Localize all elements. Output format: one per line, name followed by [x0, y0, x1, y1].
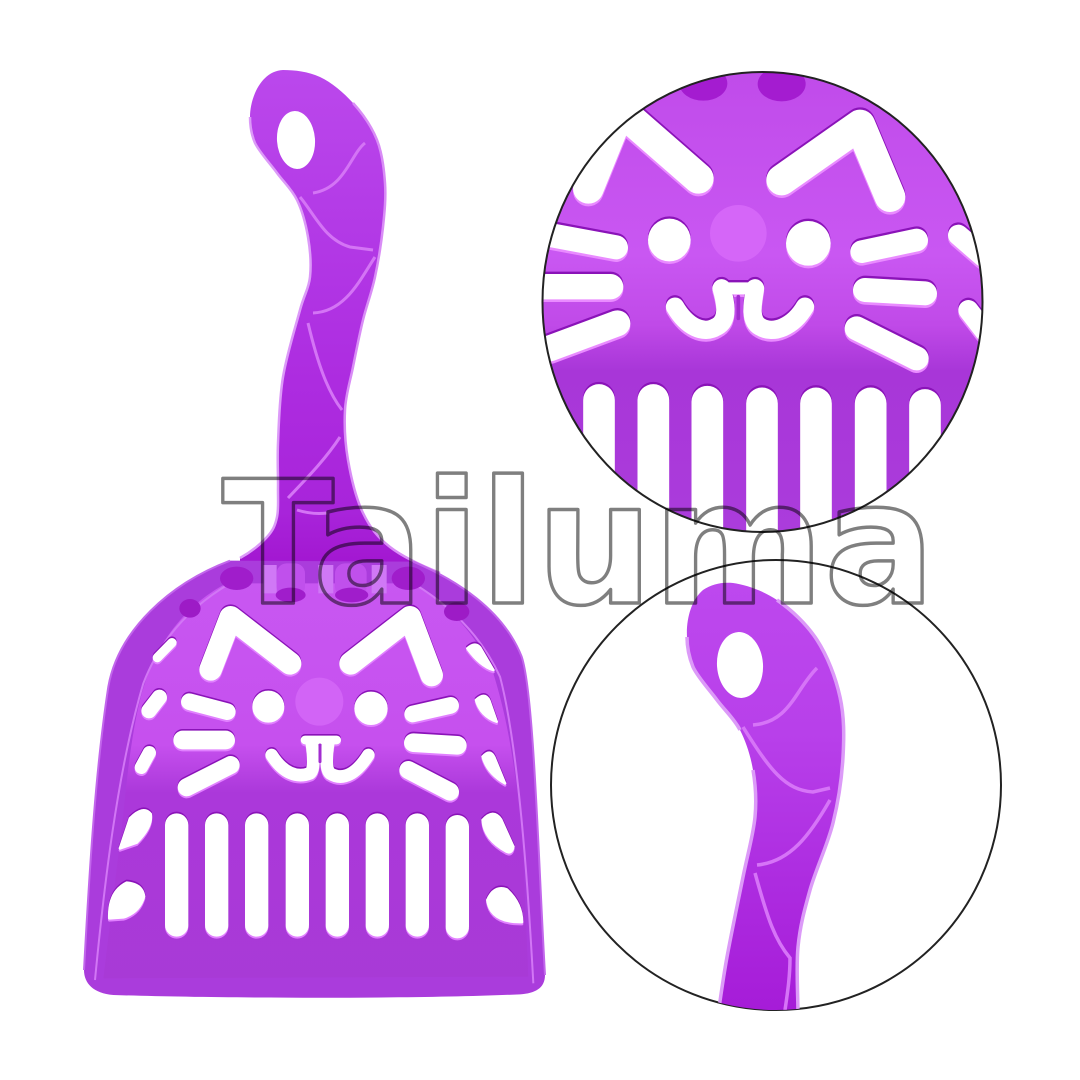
inner face panel [103, 583, 528, 978]
panel: full scoop product view [84, 70, 545, 998]
cat face and slot openings [109, 617, 522, 927]
circle outline [542, 72, 982, 532]
handle hanging hole [275, 110, 317, 170]
panel: zoomed cat face circle [542, 71, 984, 533]
circle outline [551, 560, 1001, 1010]
scoop handle [240, 70, 440, 585]
basket body [84, 561, 545, 998]
watermark: Tailuma: Tailuma [222, 445, 935, 644]
cat face and slot openings [533, 110, 985, 560]
top pockets and tabs [220, 563, 425, 602]
panel: zoomed handle circle [551, 560, 1001, 1015]
top notches [681, 76, 728, 101]
handle hole [716, 632, 764, 698]
nose disc [295, 678, 343, 726]
zoomed handle [687, 583, 844, 1015]
nose disc [710, 205, 767, 262]
scoop basket with cat face [84, 561, 545, 998]
